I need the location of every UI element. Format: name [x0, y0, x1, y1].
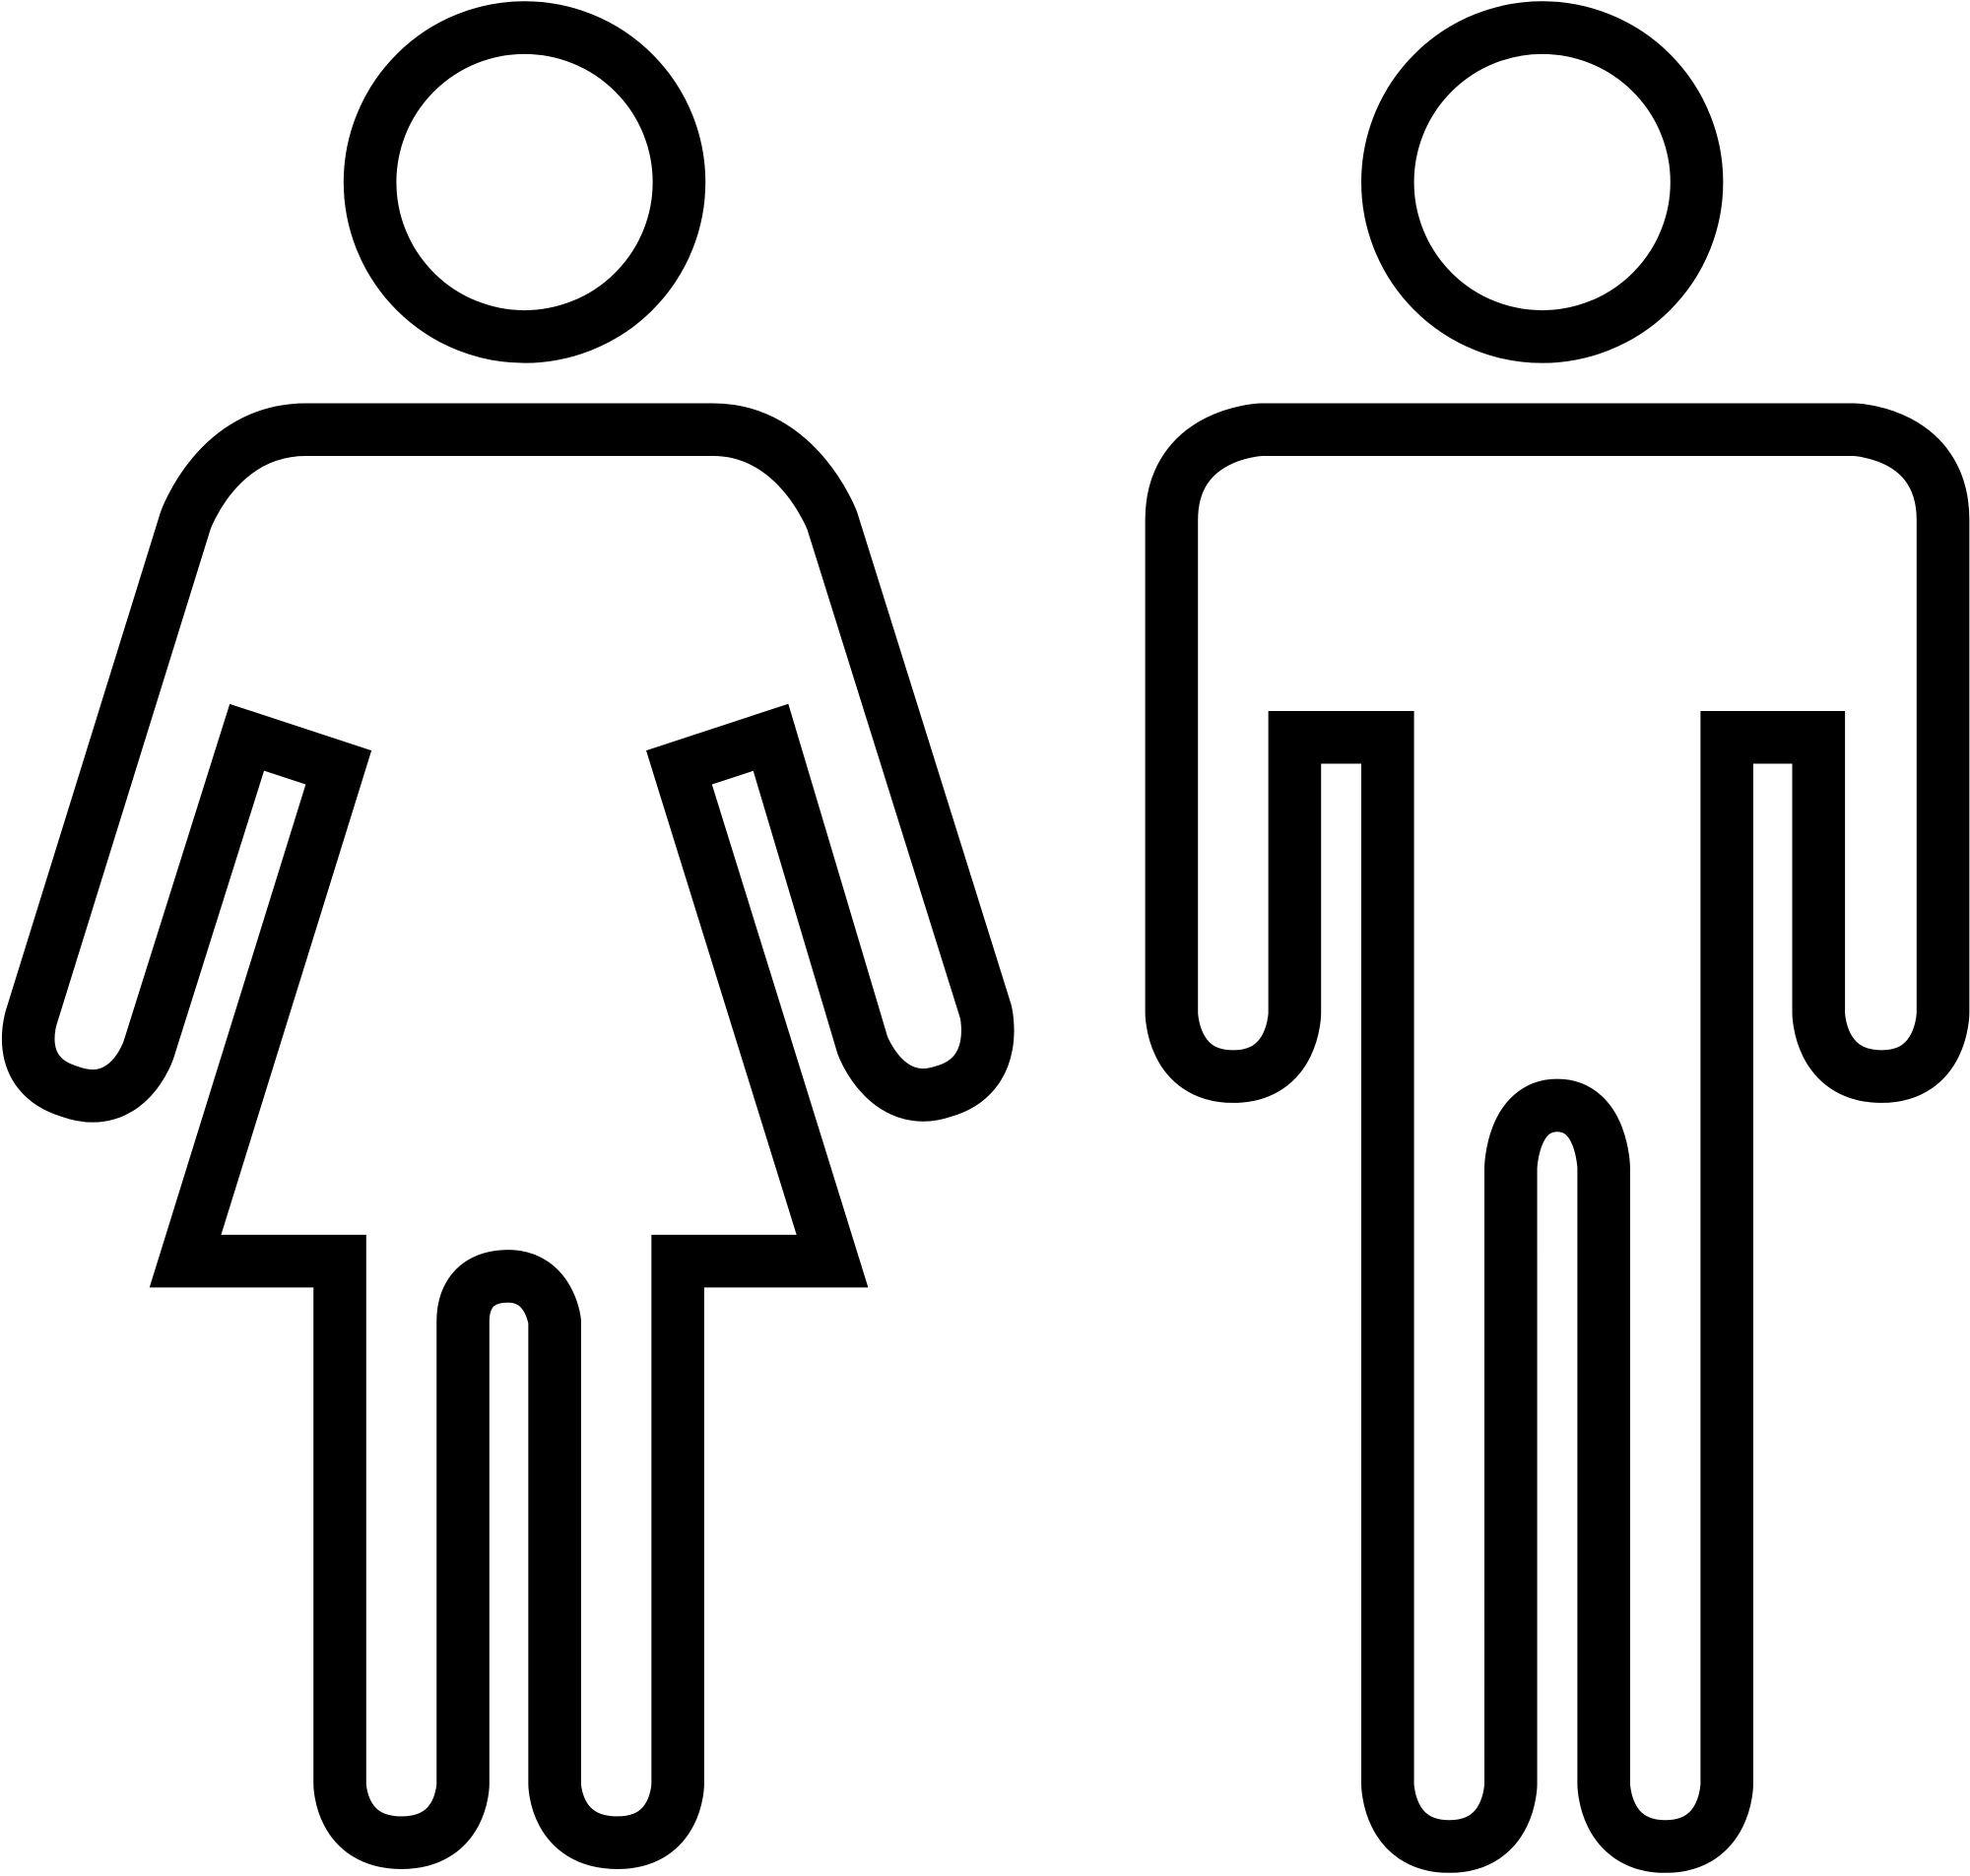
- icon: woman: [29, 28, 988, 1843]
- icon: man: [1171, 28, 1943, 1846]
- woman body: [29, 429, 988, 1843]
- man body: [1171, 429, 1943, 1846]
- woman head: [370, 28, 679, 337]
- man head: [1388, 28, 1697, 337]
